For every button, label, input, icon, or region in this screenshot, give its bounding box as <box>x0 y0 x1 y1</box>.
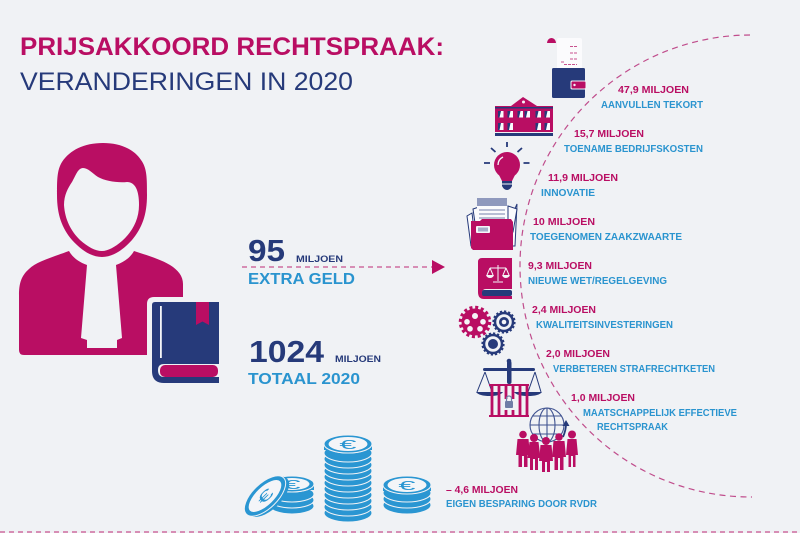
label: innovatie: INNOVATIE <box>541 187 595 199</box>
label: nieuwe wet/regelgeving: NIEUWE WET/REGELGEVING <box>528 275 667 287</box>
left coin stack: € <box>255 486 277 508</box>
icon: scales and prison <box>476 359 542 416</box>
icon: receipt and wallet <box>547 38 586 98</box>
right coin stack: € <box>398 479 416 493</box>
title: VERANDERINGEN IN 2020 <box>20 68 353 96</box>
label: innovatie <box>541 172 618 199</box>
judge hair <box>57 143 147 257</box>
stat: 95 miljoen extra geld: MILJOEN <box>296 254 343 265</box>
label: eigen besparing door rvdr <box>446 484 597 510</box>
icon: court building <box>495 97 553 136</box>
label: toegenomen zaakzwaarte: TOEGENOMEN ZAAKZWAARTE <box>530 231 682 243</box>
label: verbeteren strafrechtketen <box>546 348 715 375</box>
label: nieuwe wet/regelgeving <box>528 260 667 287</box>
label: maatschappelijk effectieve rechtspraak: RECHTSPRAAK <box>597 421 668 433</box>
icon: coin stacks <box>238 435 431 525</box>
label: kwaliteitsinvesteringen: 2,4 MILJOEN <box>532 304 596 316</box>
label: nieuwe wet/regelgeving: 9,3 MILJOEN <box>528 260 592 272</box>
label: maatschappelijk effectieve rechtspraak <box>571 392 737 433</box>
icon: light bulb <box>484 142 530 190</box>
stat: 1024 miljoen totaal 2020: 1024 <box>249 334 325 369</box>
label: maatschappelijk effectieve rechtspraak: MAATSCHAPPELIJK EFFECTIEVE <box>583 407 737 419</box>
icon: law book with scales <box>478 258 512 299</box>
stat: 1024 miljoen totaal 2020: TOTAAL 2020 <box>248 371 360 388</box>
label: kwaliteitsinvesteringen <box>532 304 673 331</box>
stat: 95 miljoen extra geld: 95 <box>248 233 285 268</box>
title: PRIJSAKKOORD RECHTSPRAAK: <box>20 33 444 61</box>
stat: 1024 miljoen totaal 2020 <box>248 334 381 388</box>
icon: gears <box>460 308 514 354</box>
label: verbeteren strafrechtketen: VERBETEREN STRAFRECHTKETEN <box>553 363 715 375</box>
label: aanvullen tekort: 47,9 MILJOEN <box>618 84 689 96</box>
stat: 95 miljoen extra geld <box>248 233 355 288</box>
stat: 95 miljoen extra geld: EXTRA GELD <box>248 271 355 288</box>
label: innovatie: 11,9 MILJOEN <box>548 172 618 184</box>
left coin stack <box>238 468 314 525</box>
arrow <box>242 260 445 274</box>
icon: globe and people <box>516 408 578 472</box>
label: toegenomen zaakzwaarte <box>530 216 682 243</box>
stat: 1024 miljoen totaal 2020: MILJOEN <box>335 354 381 365</box>
label: maatschappelijk effectieve rechtspraak: 1,0 MILJOEN <box>571 392 635 404</box>
title <box>20 33 444 96</box>
judge body <box>19 251 183 355</box>
label: eigen besparing door rvdr: EIGEN BESPARING DOOR RVDR <box>446 498 597 510</box>
icon: judge with book <box>19 143 219 383</box>
label: kwaliteitsinvesteringen: KWALITEITSINVESTERINGEN <box>536 319 673 331</box>
right coin stack <box>383 476 431 514</box>
label: aanvullen tekort <box>601 84 704 111</box>
label: verbeteren strafrechtketen: 2,0 MILJOEN <box>546 348 610 360</box>
label: toename bedrijfskosten <box>564 128 703 155</box>
label: eigen besparing door rvdr: – 4,6 MILJOEN <box>446 484 518 496</box>
tall coin stack <box>324 435 372 522</box>
law book <box>152 302 219 383</box>
tall coin stack: € <box>339 438 357 452</box>
left coin stack: € <box>283 478 301 492</box>
label: toename bedrijfskosten: TOENAME BEDRIJFSKOSTEN <box>564 143 703 155</box>
label: toename bedrijfskosten: 15,7 MILJOEN <box>574 128 644 140</box>
label: toegenomen zaakzwaarte: 10 MILJOEN <box>533 216 595 228</box>
label: aanvullen tekort: AANVULLEN TEKORT <box>601 99 704 111</box>
icon: case folder <box>467 198 517 250</box>
